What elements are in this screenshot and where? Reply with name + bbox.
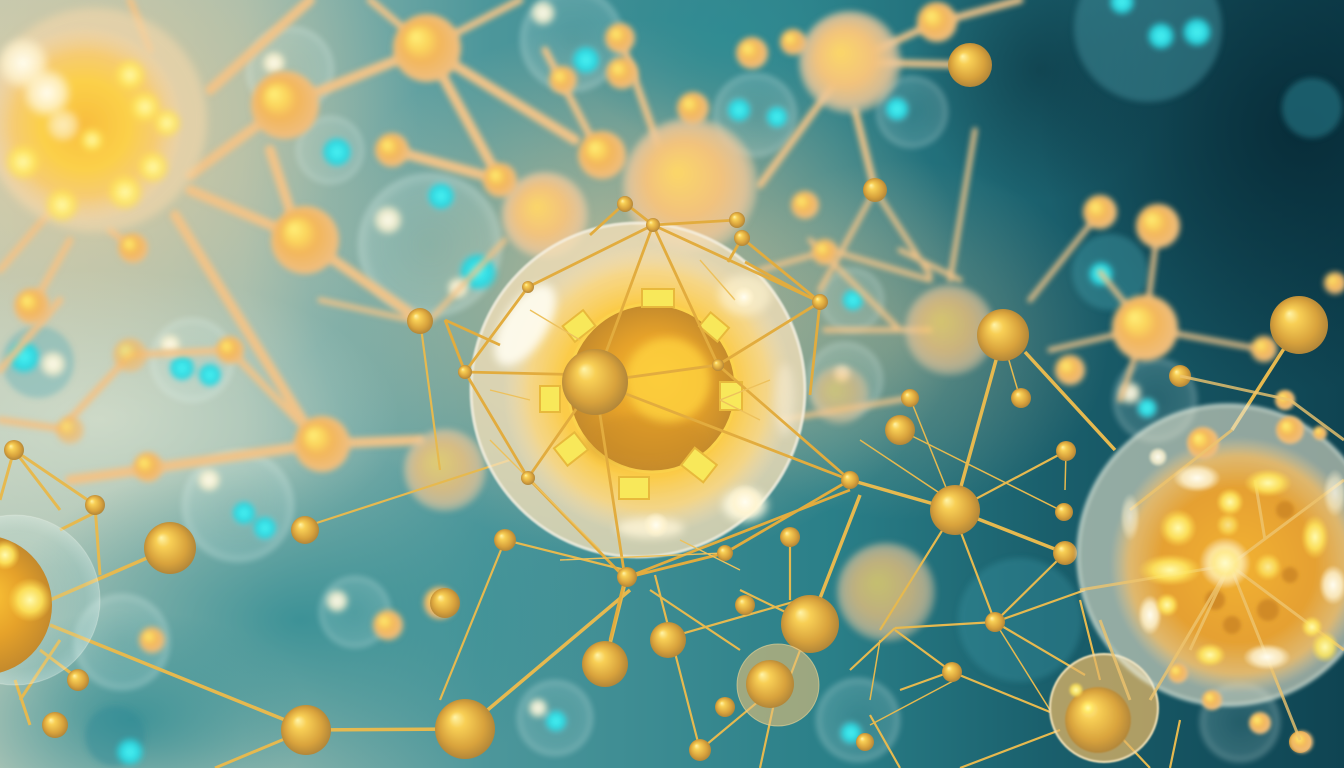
left edge gold sphere cluster [0, 515, 100, 685]
cage joints [458, 196, 859, 587]
wire cage [445, 203, 850, 640]
bubble with gold ball: bottom centre [737, 644, 819, 726]
rim nodes [1168, 390, 1327, 753]
gold core [568, 304, 736, 472]
central gold ball [562, 349, 628, 415]
chip ring [540, 289, 742, 499]
sparkles [643, 286, 763, 538]
central glass sphere with gold core and wire cage [445, 196, 859, 640]
thin cage strands [490, 260, 770, 570]
inner glow [503, 245, 793, 535]
bubble with gold ball: bottom right [1050, 654, 1158, 762]
glass sphere shell [471, 223, 805, 557]
large glowing sphere: right [1078, 376, 1344, 753]
sharp gold network: lower right and bottom [0, 320, 1299, 768]
large glowing cluster: top left [0, 8, 207, 232]
blurred gold network: upper left and top [0, 0, 1265, 480]
amber inner nodes [1205, 501, 1298, 634]
white glare [482, 274, 795, 538]
